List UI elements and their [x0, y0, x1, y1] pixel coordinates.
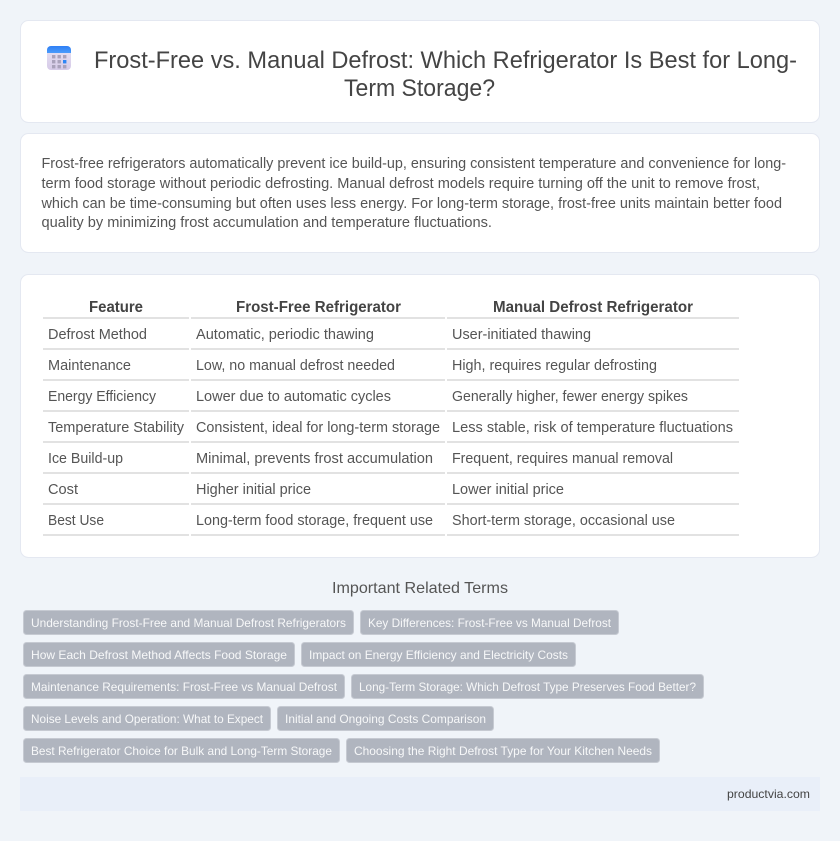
- chip: [302, 642, 576, 666]
- intro text: quality by minimizing frost accumulation and temperature fluctuations.: [42, 215, 492, 231]
- footer: productvia.com: [727, 787, 810, 801]
- row: temperature stability: [43, 420, 739, 443]
- row: maintenance: Maintenance: [48, 358, 131, 374]
- row: defrost method: Defrost Method: [48, 327, 147, 343]
- chip: [24, 738, 340, 762]
- row: ice build-up: Frequent, requires manual removal: [452, 451, 673, 467]
- row: cost: Lower initial price: [452, 482, 564, 498]
- chip: [360, 610, 618, 634]
- row: ice build-up: Minimal, prevents frost accumulation: [196, 451, 433, 467]
- row: temperature stability: Consistent, ideal for long-term storage: [196, 420, 440, 436]
- chip: Initial and Ongoing Costs Comparison: [285, 712, 486, 726]
- row: ice build-up: [43, 451, 739, 474]
- chip: Noise Levels and Operation: What to Expect: [31, 712, 264, 726]
- row: cost: Higher initial price: [196, 482, 311, 498]
- row: ice build-up: Ice Build-up: [48, 451, 123, 467]
- table header: Manual Defrost Refrigerator: [493, 299, 693, 316]
- icon: calendar grid: [47, 46, 71, 70]
- row: defrost method: User-initiated thawing: [452, 327, 591, 343]
- row: energy efficiency: Energy Efficiency: [48, 389, 157, 405]
- title: [94, 47, 797, 102]
- row: maintenance: Low, no manual defrost needed: [196, 358, 395, 374]
- table header: Frost-Free Refrigerator: [236, 299, 401, 316]
- related term chips: [24, 610, 704, 762]
- intro text: [40, 156, 786, 231]
- chip: [346, 738, 660, 762]
- chip: [24, 610, 354, 634]
- chip: Key Differences: Frost-Free vs Manual Defrost: [368, 616, 612, 630]
- row: defrost method: Automatic, periodic thawing: [196, 327, 374, 343]
- footer: [20, 777, 820, 811]
- intro text: which can be time-consuming but often uses less energy. For long-term storage, frost-free units maintain better food: [40, 196, 782, 212]
- panel: comparison table: [20, 274, 820, 558]
- chip: Maintenance Requirements: Frost-Free vs Manual Defrost: [31, 680, 338, 694]
- panel: introduction: [20, 134, 820, 252]
- row: temperature stability: Less stable, risk of temperature fluctuations: [452, 420, 733, 436]
- chip: [24, 642, 294, 666]
- chip: How Each Defrost Method Affects Food Storage: [31, 648, 287, 662]
- chip: Impact on Energy Efficiency and Electricity Costs: [309, 648, 568, 662]
- row: best use: Short-term storage, occasional use: [452, 513, 675, 529]
- chip: Long-Term Storage: Which Defrost Type Preserves Food Better?: [359, 680, 696, 694]
- row: energy efficiency: [43, 389, 739, 412]
- row: energy efficiency: Lower due to automatic cycles: [196, 389, 391, 405]
- row: maintenance: [43, 358, 739, 381]
- row: cost: Cost: [48, 482, 78, 498]
- intro text: Frost-free refrigerators automatically prevent ice build-up, ensuring consistent temperature and convenience for long-: [42, 156, 786, 172]
- chip: [278, 706, 494, 730]
- row: best use: Long-term food storage, frequent use: [196, 513, 433, 529]
- chip: [352, 674, 704, 698]
- chip: Understanding Frost-Free and Manual Defrost Refrigerators: [31, 616, 346, 630]
- title: Frost-Free vs. Manual Defrost: Which Refrigerator Is Best for Long-: [94, 47, 797, 74]
- title: Term Storage?: [344, 75, 495, 102]
- chip: Best Refrigerator Choice for Bulk and Long-Term Storage: [31, 744, 332, 758]
- chip: [24, 706, 270, 730]
- chip: [24, 674, 344, 698]
- heading: important related terms: Important Related Terms: [332, 580, 508, 597]
- row: defrost method: [43, 327, 739, 350]
- row: cost: [43, 482, 739, 505]
- chip: Choosing the Right Defrost Type for Your Kitchen Needs: [354, 744, 652, 758]
- panel: title: [20, 20, 820, 122]
- row: temperature stability: Temperature Stability: [48, 420, 185, 436]
- row: energy efficiency: Generally higher, fewer energy spikes: [452, 389, 688, 405]
- intro text: term food storage without periodic defrosting. Manual defrost models require turning off the unit to remove frost,: [42, 176, 760, 192]
- row: best use: [43, 513, 739, 536]
- table header: [43, 299, 739, 319]
- row: maintenance: High, requires regular defrosting: [452, 358, 657, 374]
- table header: Feature: [89, 299, 143, 316]
- row: best use: Best Use: [48, 513, 104, 529]
